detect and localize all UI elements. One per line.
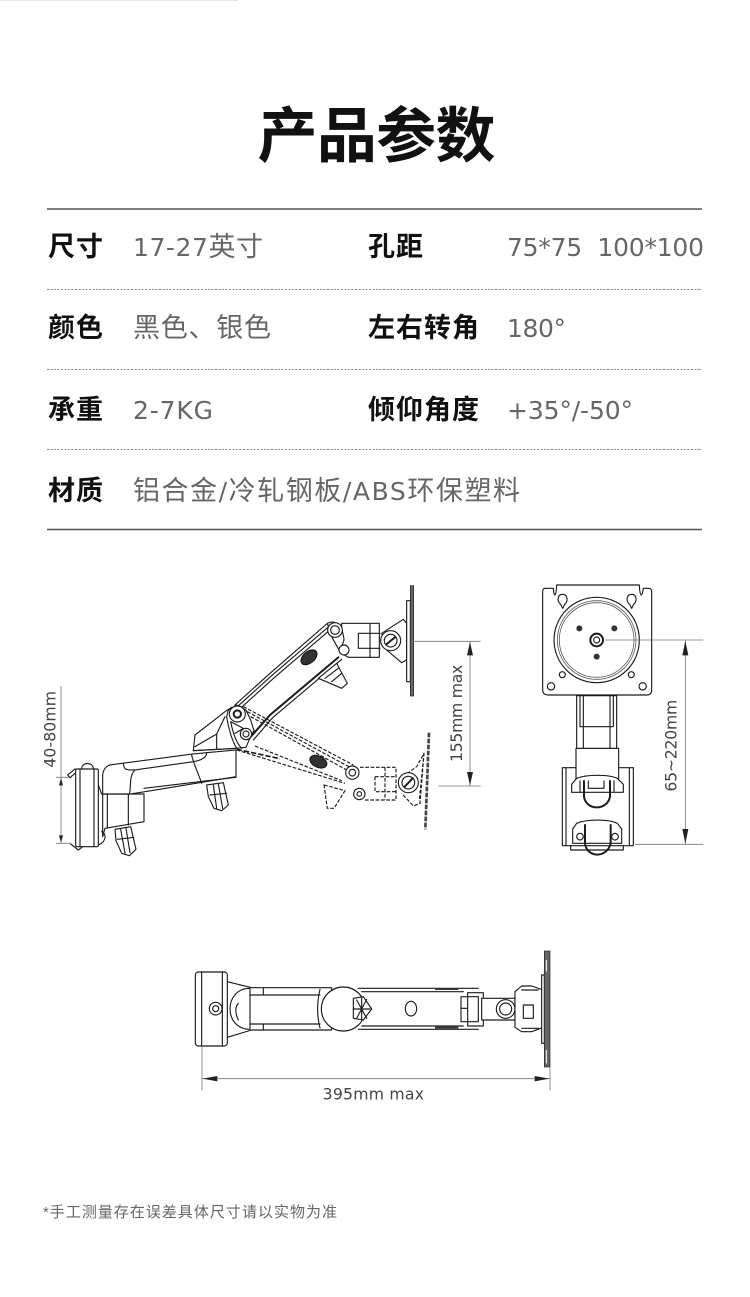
side view diagram: clamp base and lower arm xyxy=(40,686,237,856)
dimension: 65~220mm: 65~220mm xyxy=(662,700,681,792)
spec row: material: 铝合金/冷轧钢板/ABS环保塑料 xyxy=(133,476,520,507)
spec row: size and hole pitch: 尺寸 xyxy=(48,232,103,262)
raised arm xyxy=(235,622,380,740)
lower arm xyxy=(103,707,237,837)
mount head and plate xyxy=(515,951,550,1067)
spec row: material: 材质 xyxy=(48,476,103,506)
spec row: size and hole pitch: 75*75 100*100 xyxy=(507,233,704,262)
lower swivel and plate xyxy=(398,733,429,829)
spec row: colour and swivel: 180° xyxy=(507,314,566,343)
dimension: 65~220mm xyxy=(605,640,703,844)
dimension: 395mm max xyxy=(202,1046,550,1104)
clamp outer frame xyxy=(562,768,633,850)
clamp knobs xyxy=(115,783,228,856)
dimension: 155mm max xyxy=(413,641,481,786)
first arm section xyxy=(227,982,332,1037)
elbow joint xyxy=(227,705,254,748)
spec row: size and hole pitch: 17-27英寸 xyxy=(133,232,263,263)
top view diagram xyxy=(195,951,550,1104)
spec row: colour and swivel: 颜色 xyxy=(48,313,103,343)
spec row: colour and swivel: 左右转角 xyxy=(368,313,479,343)
front view diagram xyxy=(543,585,703,855)
spec row: load and tilt: 倾仰角度 xyxy=(368,395,479,425)
dimension: 40-80mm: 40-80mm xyxy=(40,691,59,768)
lowered arm (dashed) xyxy=(237,707,396,808)
title: 产品参数 xyxy=(258,103,496,170)
head connector xyxy=(461,993,515,1026)
dimension: 395mm max: 395mm max xyxy=(323,1085,424,1104)
spec row: load and tilt xyxy=(48,395,633,425)
spec row: load and tilt: 承重 xyxy=(48,395,103,425)
spec row: colour and swivel: 黑色、银色 xyxy=(133,313,271,344)
spec row: colour and swivel xyxy=(48,313,566,344)
footnote: *手工测量存在误差具体尺寸请以实物为准 xyxy=(43,1204,337,1221)
second arm section xyxy=(358,988,478,1029)
spec row: load and tilt: +35°/-50° xyxy=(507,396,633,425)
dimension: 155mm max: 155mm max xyxy=(447,665,466,762)
arm from front xyxy=(576,696,619,779)
clamp plate xyxy=(68,763,105,850)
upper swivel and plate xyxy=(381,586,414,696)
spec row: size and hole pitch: 孔距 xyxy=(368,232,423,262)
clamp from front xyxy=(572,775,623,855)
clamp block xyxy=(195,972,227,1046)
mount plate xyxy=(543,585,652,695)
spec row: size and hole pitch xyxy=(48,232,704,263)
side view diagram: raised and lowered arm positions xyxy=(227,586,481,829)
spec row: load and tilt: 2-7KG xyxy=(133,396,213,425)
dimension: 40-80mm xyxy=(40,686,71,843)
elbow joint xyxy=(321,987,372,1031)
